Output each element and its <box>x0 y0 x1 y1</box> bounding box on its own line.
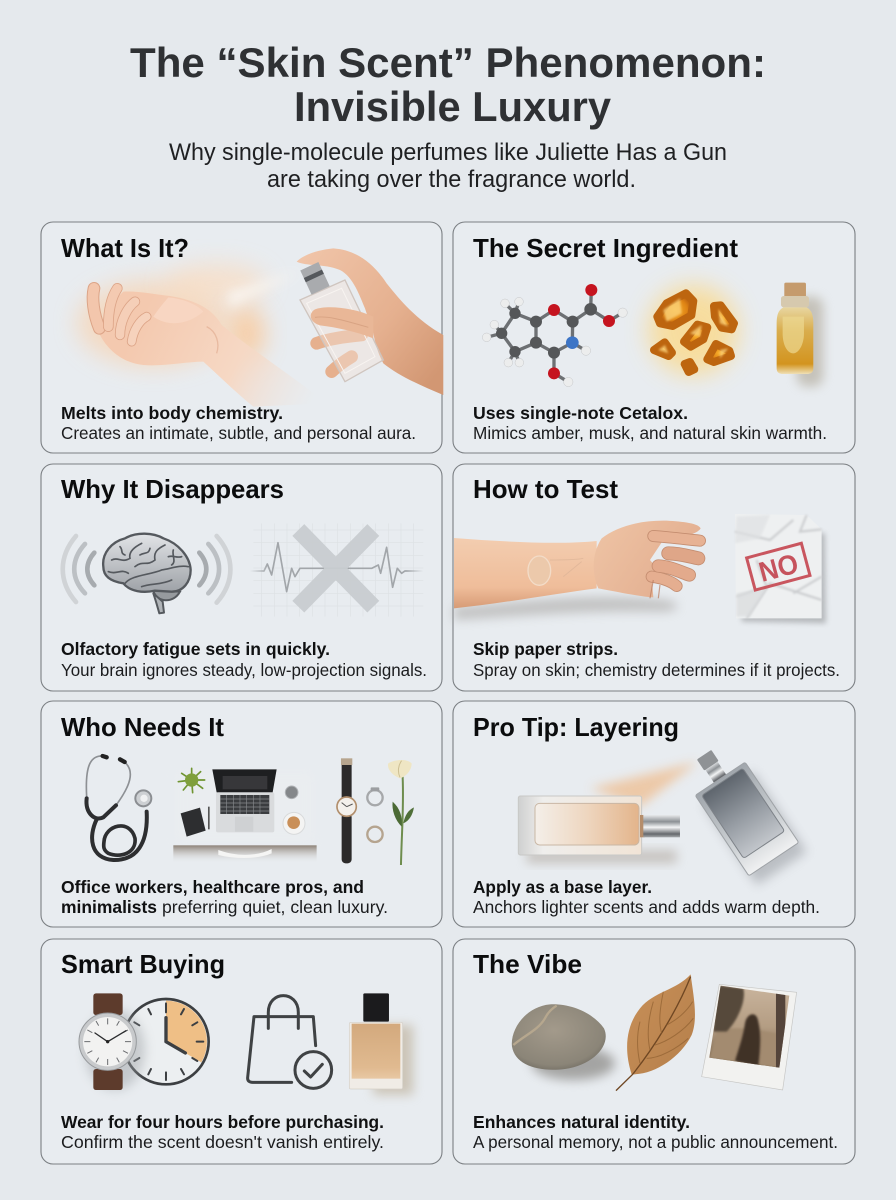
panel: The Vibe <box>453 939 855 1164</box>
polaroid <box>702 984 797 1090</box>
caption: Wear for four hours before purchasing. <box>61 1112 384 1132</box>
subtitle <box>169 139 727 193</box>
illustration: watch, clock, shopping bag and bottle <box>79 993 413 1095</box>
title: The “Skin Scent” Phenomenon: <box>130 39 766 86</box>
illustration: stone, leaf and polaroid <box>512 974 797 1091</box>
molecule <box>482 284 627 387</box>
caption: Melts into body chemistry. <box>61 403 283 423</box>
panel: Pro Tip: Layering <box>453 701 855 927</box>
crumpled paper with NO stamp <box>735 514 826 623</box>
caption: Enhances natural identity. <box>473 1112 690 1132</box>
panel: Smart Buying <box>41 939 442 1164</box>
grid and flat-lining ECG <box>250 523 423 617</box>
caption <box>61 403 416 443</box>
caption: Spray on skin; chemistry determines if it projects. <box>473 660 840 680</box>
heading: Pro Tip: Layering <box>473 712 679 742</box>
heading: How to Test <box>473 474 618 504</box>
title: Invisible Luxury <box>294 83 612 130</box>
caption: minimalists <box>61 897 157 917</box>
caption: A personal memory, not a public announcement. <box>473 1132 838 1152</box>
tilted grey bottle <box>679 738 807 885</box>
caption: Skip paper strips. <box>473 639 618 659</box>
heading: What Is It? <box>61 233 189 263</box>
heading: Smart Buying <box>61 949 225 979</box>
caption: Your brain ignores steady, low-projection signals. <box>61 660 427 680</box>
illustration: stethoscope, desk, watch and flower <box>86 756 414 865</box>
illustration: arm with skin patch and rejected paper strip <box>454 514 826 623</box>
dried leaf <box>616 974 695 1091</box>
horizontal warm bottle <box>518 796 680 863</box>
caption <box>473 1112 838 1152</box>
subtitle: Why single-molecule perfumes like Juliette Has a Gun <box>169 139 727 166</box>
illustration: two layered perfume bottles <box>518 738 807 885</box>
four-hour clock <box>123 999 209 1084</box>
panel: What Is It? <box>41 222 443 453</box>
heading: Why It Disappears <box>61 474 284 504</box>
illustration: brain and crossed-out signal <box>63 523 423 617</box>
title <box>130 39 766 130</box>
heading: The Vibe <box>473 949 582 979</box>
caption <box>473 403 827 443</box>
stethoscope <box>86 756 151 860</box>
wrist watch <box>79 993 145 1090</box>
subtitle: are taking over the fragrance world. <box>267 166 636 193</box>
heading: Who Needs It <box>61 712 224 742</box>
watch, rings and flower <box>337 758 414 865</box>
shopping bag with check <box>248 996 332 1088</box>
caption <box>61 639 427 680</box>
caption <box>473 639 840 680</box>
signal arcs <box>63 536 230 603</box>
caption: Confirm the scent doesn't vanish entirely. <box>61 1132 384 1152</box>
brain <box>103 534 191 613</box>
caption: Anchors lighter scents and adds warm depth. <box>473 897 820 917</box>
caption: Office workers, healthcare pros, and <box>61 877 364 897</box>
oil vial <box>777 283 823 387</box>
panel: Who Needs It <box>41 701 442 927</box>
amber stones <box>648 285 738 375</box>
caption: Creates an intimate, subtle, and personal aura. <box>61 423 416 443</box>
panel: The Secret Ingredient <box>453 222 855 453</box>
stamp: NO <box>756 548 802 588</box>
illustration: molecule, amber and oil vial <box>482 283 823 387</box>
heading: The Secret Ingredient <box>473 233 738 263</box>
arm <box>454 521 701 620</box>
desk with laptop <box>173 768 317 863</box>
caption: Mimics amber, musk, and natural skin warmth. <box>473 423 827 443</box>
amber bottle <box>349 993 413 1095</box>
panel: Why It Disappears <box>41 464 442 691</box>
caption <box>473 877 820 917</box>
stone <box>512 1004 615 1080</box>
caption: preferring quiet, clean luxury. <box>162 897 388 917</box>
caption: Apply as a base layer. <box>473 877 652 897</box>
caption: Olfactory fatigue sets in quickly. <box>61 639 330 659</box>
illustration: perfume sprayed on wrist <box>77 248 443 407</box>
caption <box>61 1112 384 1152</box>
caption: Uses single-note Cetalox. <box>473 403 688 423</box>
caption <box>61 877 388 917</box>
panel: How to Test <box>453 464 855 691</box>
spray mist <box>590 762 698 807</box>
